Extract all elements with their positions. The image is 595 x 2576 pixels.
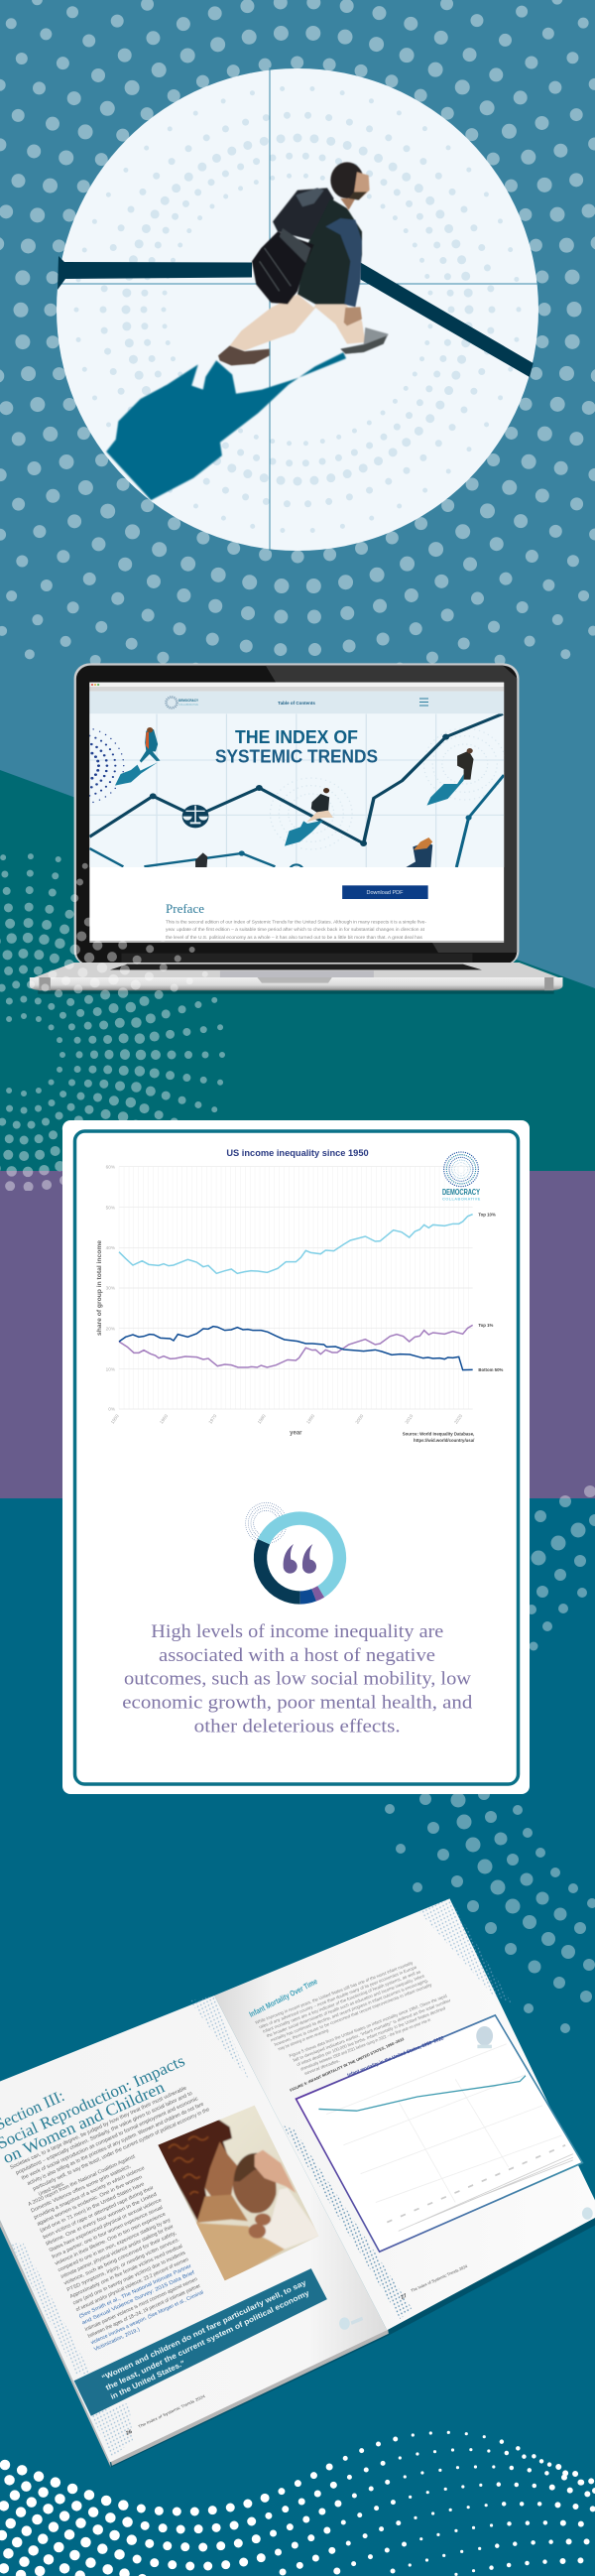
- logo: democracy collaborative: DEMOCRACY: [442, 1188, 480, 1197]
- halftone dots right of card and above report: [385, 1485, 595, 2033]
- chart title: US income inequality since 1950: [226, 1148, 369, 1158]
- left page body column: Domestic Violence offers some grim statistics,: [30, 2163, 132, 2214]
- quote band text: in the United States.”: [109, 2359, 186, 2401]
- x axis labels: 1950: [110, 1413, 120, 1425]
- x axis labels: 1990: [305, 1413, 315, 1425]
- left page footer: The Index of Systemic Trends 2024: [137, 2393, 206, 2429]
- hero illustration on screen: [89, 713, 504, 867]
- screen nav: logo, table of contents, menu: COLLABORATIVE: [178, 704, 198, 707]
- series: top 1 percent: [119, 1325, 473, 1367]
- left page intro paragraph: [9, 2081, 213, 2204]
- quote icon: ring with quotation marks: [246, 1502, 339, 1598]
- left page body column: against women is endemic. One in five women: [36, 2174, 144, 2228]
- faint dot rings inside circle: [76, 88, 519, 531]
- quote band: [74, 2268, 327, 2416]
- quote text: [122, 1621, 473, 1737]
- bold chart line: [58, 256, 534, 377]
- left page intro paragraph: the work of social reproduction as compared to formal employment and economic: [21, 2096, 199, 2182]
- x axis labels: 1970: [207, 1413, 218, 1425]
- left page body column: from a partner; one in four women experience sexual: [52, 2205, 164, 2260]
- quote band text: [100, 2277, 311, 2401]
- left page body column: A 2020 report from the National Coalition Against: [27, 2153, 137, 2208]
- series labels: Top 1%: [478, 1323, 494, 1328]
- right page body text: mortality has continued its decline, and recent progress in infant outcomes is encouraging,: [270, 1978, 428, 2043]
- hero circle with walking man: [57, 67, 538, 551]
- y axis labels: 30%: [106, 1286, 115, 1291]
- right page: [214, 1898, 595, 2330]
- right page body text: fall in developed indicators earlier, "infant mortality" is defined as the total number: [293, 1997, 452, 2063]
- right page body text: may be slowing or even reversing.: [278, 2027, 330, 2051]
- shadow of walking man: [106, 352, 346, 500]
- right page body text: of infant deaths per 100,000 live births. Infant mortality in the United States declined: [297, 2005, 446, 2067]
- left page intro paragraph: populations – especially children. Similarly, the value given to social labor and to: [15, 2091, 193, 2176]
- left page body column: intimate partner, physical violence and/or stalking for their: [60, 2224, 175, 2280]
- right page body text: Infant mortality rates are a key indicator of the functioning of health systems, as well as: [262, 1969, 421, 2034]
- preface heading and text: Preface: [166, 902, 204, 916]
- screen hero title: THE INDEX OF: [235, 726, 358, 747]
- y axis labels: 60%: [106, 1164, 115, 1169]
- quote text: associated with a host of negative: [159, 1645, 435, 1666]
- left page footer: [125, 2393, 206, 2437]
- left page body column: violence, such as being concerned for their safety,: [63, 2231, 178, 2287]
- walking man figure: [218, 162, 389, 365]
- right page footer: The Index of Systemic Trends 2024: [410, 2263, 469, 2293]
- logo: democracy collaborative: [442, 1152, 481, 1201]
- series: top 10 percent: [119, 1215, 473, 1273]
- left page intro paragraph: Societies can, to a large degree, be judged by how they treat their most vulnerable: [9, 2085, 187, 2171]
- right page body text: dramatically between 1950 and 2021 before rising in 2022 – the first year-on-year rise in: [299, 2017, 431, 2072]
- quote text: outcomes, such as low social mobility, low: [124, 1669, 471, 1690]
- white halftone wave at bottom: [2, 2432, 595, 2576]
- left page intro paragraph: United States.: [38, 2181, 65, 2198]
- preface heading and text: This is the second edition of our Index of Systemic Trends for the United States. Although in many respects it is a simple five-: [166, 919, 427, 925]
- source note: Source: World Inequality Database,: [403, 1431, 474, 1436]
- halftone dots over teal band: [0, 853, 225, 1191]
- preface heading and text: the level of the U.S. political economy as a whole – it has also turned out to be a little bit more than that. A great deal has: [166, 935, 423, 940]
- photo: mother and baby: [159, 2106, 319, 2280]
- series: bottom 50 percent: [119, 1327, 473, 1370]
- right page body text: however, there is cause to be concerned that recent improvements in infant mortality: [274, 1982, 433, 2047]
- left page intro paragraph: particularly well, to say the least, under the current system of political economy in the: [32, 2107, 210, 2192]
- left page body column: violence involves a weapon. (See Morgan et al., Criminal: [90, 2289, 204, 2346]
- screen nav: logo, table of contents, menu: DEMOCRACY: [178, 698, 198, 703]
- halftone corners: [11, 1898, 513, 2458]
- left page body column: providing a snapshot of a society in which violence: [33, 2165, 146, 2221]
- x axis labels: [110, 1413, 463, 1425]
- download button label: Download PDF: [367, 890, 404, 896]
- left page intro paragraph: activity is also telling as to the priorities of any system. Women and children do not fare: [27, 2102, 205, 2187]
- quote text: economic growth, poor mental health, and: [122, 1693, 473, 1714]
- quote band text: the least, under the current system of political economy: [104, 2288, 311, 2392]
- halftone dots around hero circle: [0, 0, 595, 663]
- right page heading: Infant Mortality Over Time: [248, 1977, 319, 2019]
- source note: https://wid.world/country/usa/: [414, 1438, 475, 1443]
- left page body column: care (and one in twenty male victims) due to incidents: [72, 2250, 186, 2306]
- left page body column: (See Smith et al., The National Intimate Partner: [78, 2263, 192, 2320]
- preface heading and text: [166, 902, 427, 940]
- series labels: Bottom 50%: [478, 1367, 503, 1372]
- left page body column: compared to one in ten men, experience stalking by any: [58, 2217, 172, 2273]
- y axis labels: 20%: [106, 1326, 115, 1331]
- right page body text: rates of any advanced country – more than double many of its peer economies in Europe: [258, 1965, 417, 2029]
- left page body column: and Sexual Violence Survey: 2015 Data Brief: [81, 2269, 196, 2326]
- right page chart caption and title: Infant mortality in the United States, 1950–2022: [347, 2035, 445, 2079]
- screen nav: logo, table of contents, menu: [167, 697, 428, 708]
- x axis labels: 1960: [159, 1413, 169, 1425]
- logo: democracy collaborative: COLLABORATIVE: [442, 1196, 481, 1201]
- x axis labels: 2000: [354, 1413, 365, 1425]
- left page body column: between the ages of 18–24; 19 percent of intimate partner: [87, 2283, 201, 2340]
- source note: [403, 1431, 475, 1443]
- y axis labels: 10%: [106, 1366, 115, 1371]
- axis titles: share of group in total income: [96, 1239, 103, 1336]
- right page body text: several decades.: [303, 2058, 340, 2076]
- white card with chart and quote: [62, 1120, 530, 1794]
- chart frame on right page: [296, 2015, 582, 2252]
- open report mockup: [0, 1898, 595, 2468]
- line chart: US income inequality: year: [290, 1430, 302, 1436]
- laptop mockup: [30, 663, 562, 994]
- left page body column: lifetime. One in every four women in the United: [46, 2192, 158, 2248]
- left page body column: of sexual and/or physical violence; 23.2 percent of women: [75, 2256, 189, 2313]
- left page body column: Intimate partner violence is most common against women: [84, 2276, 198, 2333]
- left page body column: States have experienced physical or sexual violence: [49, 2197, 163, 2254]
- screen nav: logo, table of contents, menu: Table of Contents: [278, 701, 315, 706]
- right page body text: Figure 5 shows data from the United States on infant mortality since 1950. Given the rapid: [289, 1994, 448, 2058]
- screen hero title: [215, 726, 378, 766]
- y axis labels: [106, 1164, 115, 1412]
- left page body column: [27, 2151, 208, 2353]
- right page footer: [400, 2263, 469, 2301]
- x axis labels: 1980: [257, 1413, 267, 1425]
- x axis labels: 2020: [453, 1413, 463, 1425]
- left page body column: violence in their lifetime. One in ten men experience: [55, 2212, 167, 2267]
- line chart: US income inequality: [96, 1148, 503, 1443]
- y axis labels: 0%: [108, 1407, 115, 1412]
- left page: [0, 1996, 387, 2462]
- left page body column: Approximately one in five female victims need medical: [69, 2244, 183, 2300]
- y axis labels: 40%: [106, 1245, 115, 1250]
- quote text: other deleterious effects.: [194, 1716, 401, 1737]
- x axis labels: 2010: [404, 1413, 415, 1425]
- left page body column: been victims of rape or attempted rape during their: [42, 2185, 155, 2241]
- left page body column: (and one in 71 men) in the United States have: [39, 2181, 146, 2234]
- right page chart caption and title: FIGURE 5: INFANT MORTALITY IN THE UNITED STATES, 1950–2022: [289, 2036, 406, 2093]
- right page body text: While improving in recent years, the United States still has one of the worst infant mortality: [255, 1960, 415, 2025]
- left page heading: on Women and Children: [0, 2077, 168, 2167]
- series labels: [478, 1212, 503, 1372]
- right page footer: 27: [400, 2293, 408, 2301]
- left page body column: Victimization, 2019.): [93, 2327, 141, 2353]
- y axis labels: 50%: [106, 1205, 115, 1210]
- series labels: Top 10%: [478, 1212, 496, 1217]
- left page body column: PTSD symptoms, injury, or needing victim services.: [66, 2237, 180, 2293]
- crosshair lines: [57, 67, 538, 551]
- right page body text: [255, 1952, 458, 2086]
- quote band text: “Women and children do not fare particularly well, to say: [100, 2277, 308, 2383]
- quote text: High levels of income inequality are: [151, 1621, 443, 1642]
- left page footer: 26: [125, 2429, 133, 2437]
- preface heading and text: year update of the first edition – a suitable time period after which to check back in for substantial changes in direction at: [166, 927, 425, 932]
- screen hero title: SYSTEMIC TRENDS: [215, 746, 378, 766]
- right page body text: the broader social determinants of health such as education and income inequality. Infant: [266, 1973, 425, 2038]
